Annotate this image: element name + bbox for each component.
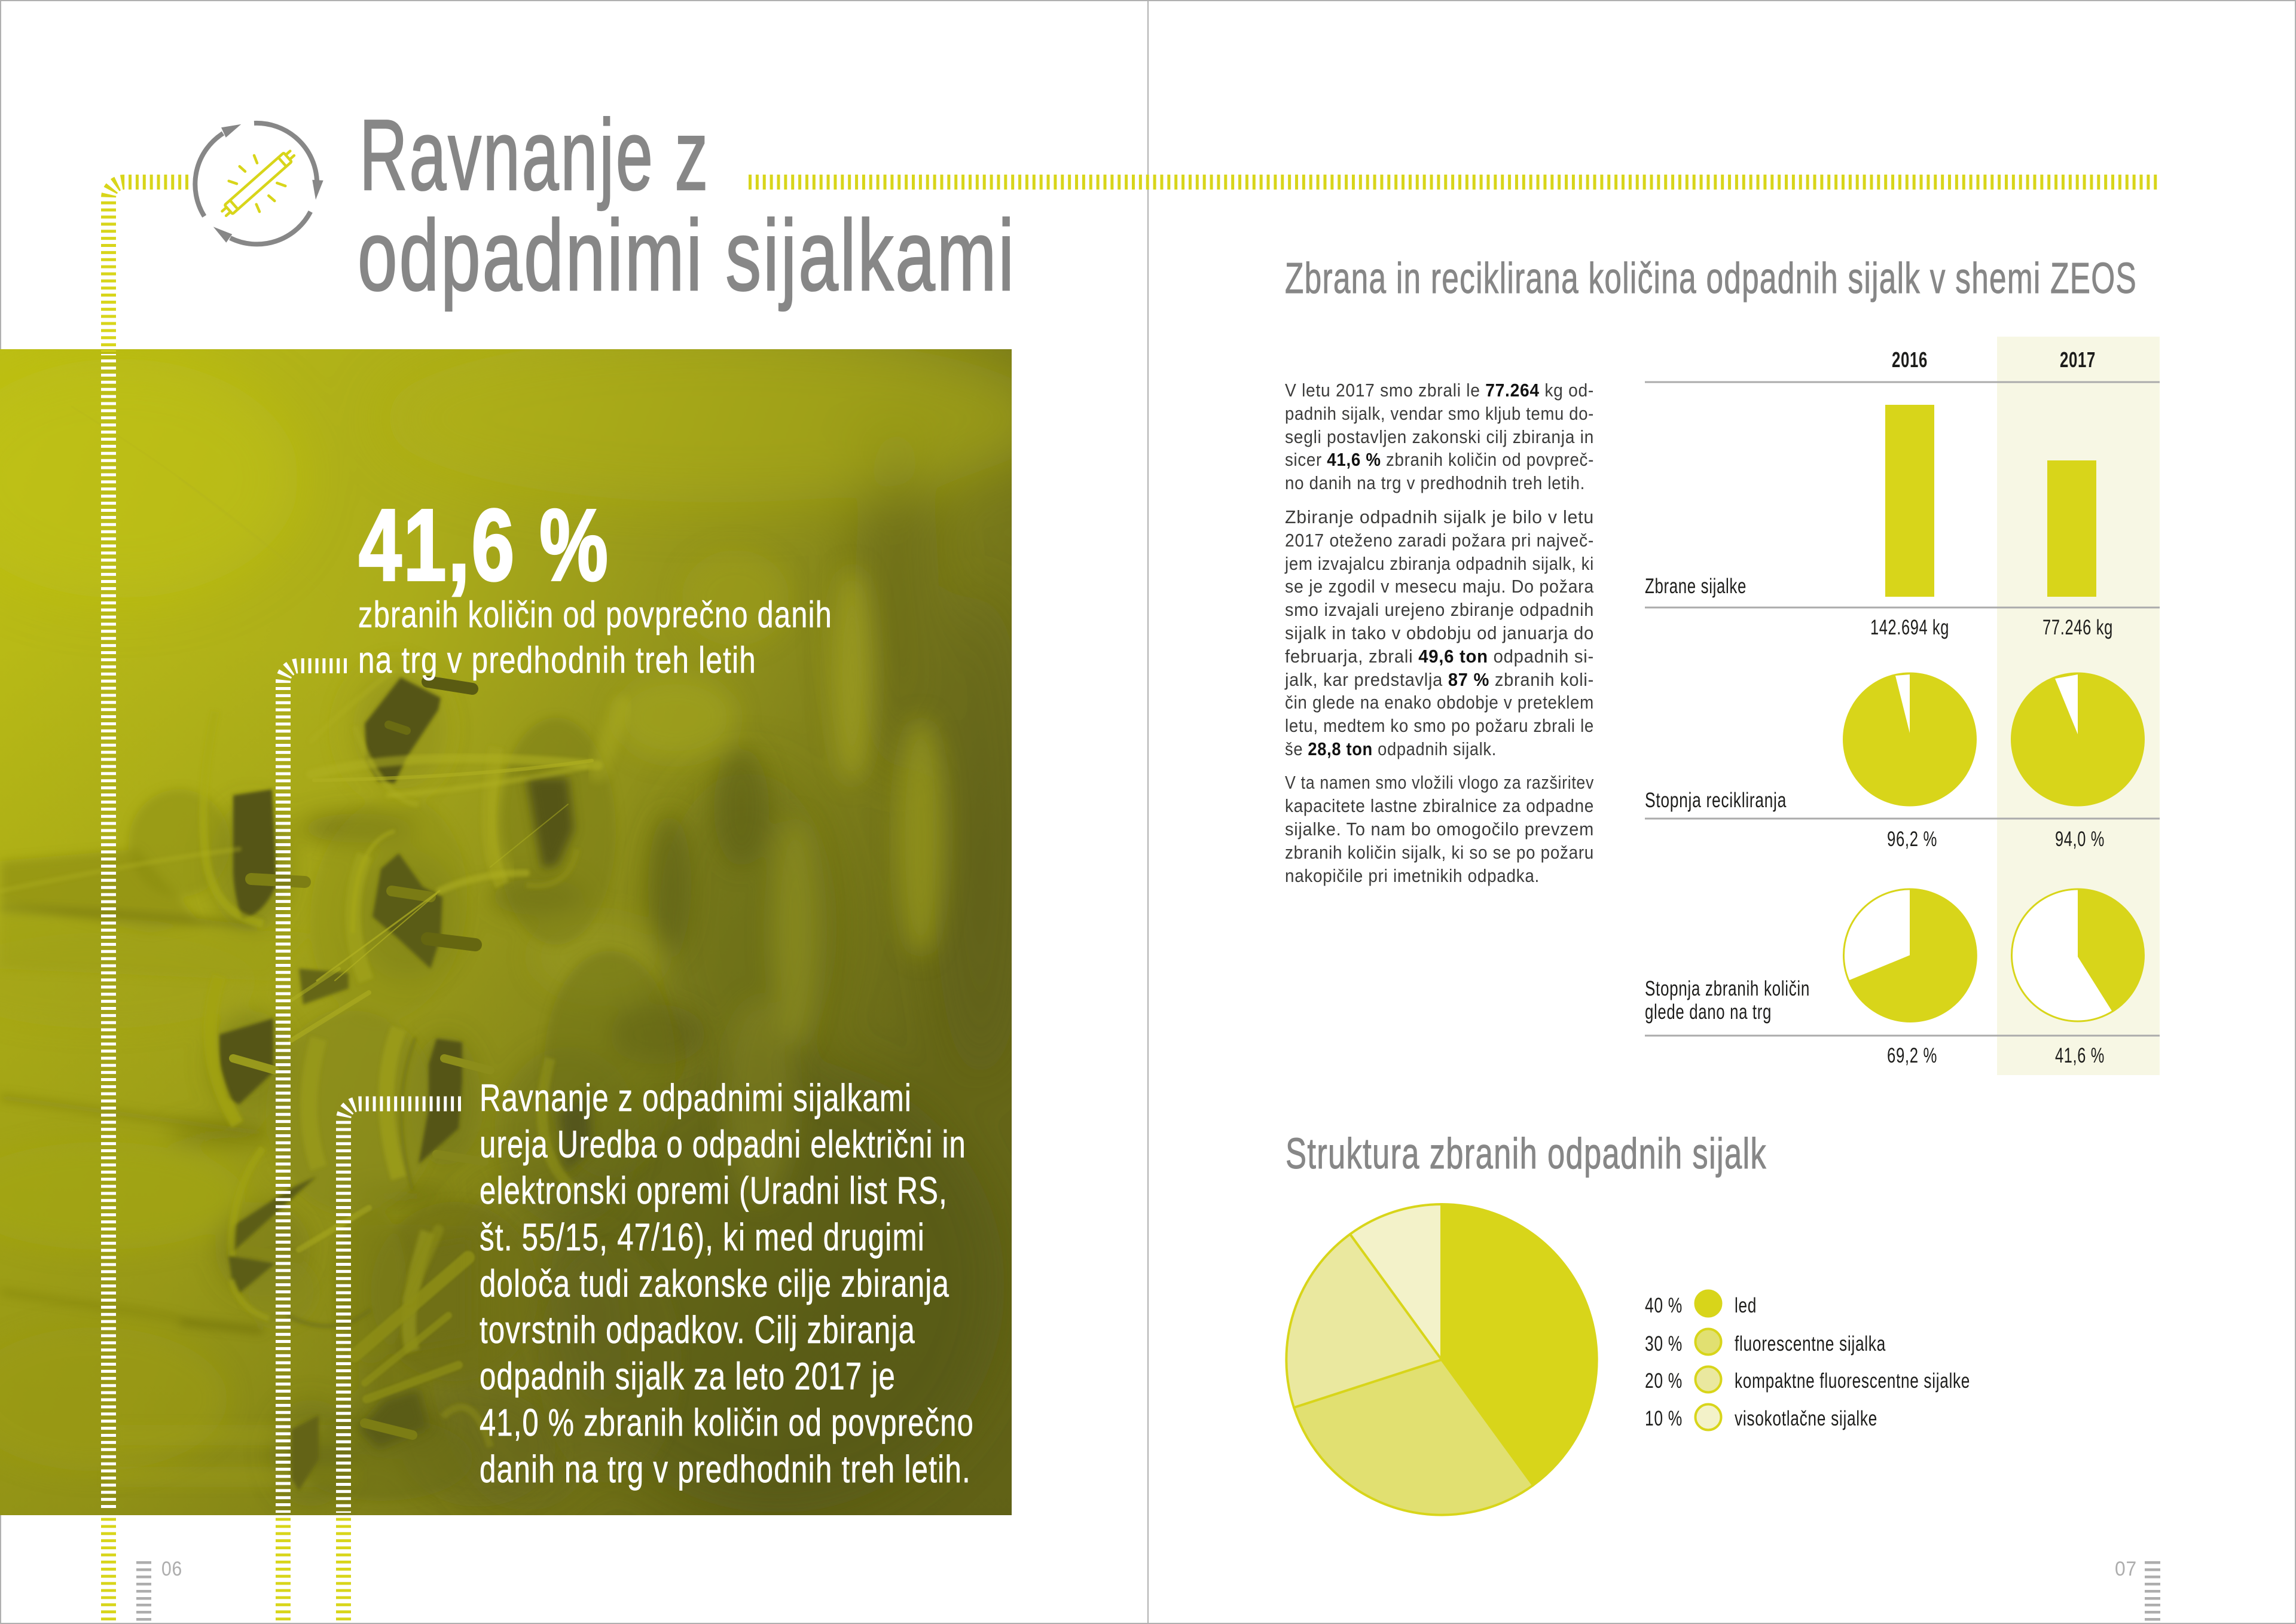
text block: explanation: Zbiranje odpadnih sijalk je bilo v letu (1285, 506, 1594, 527)
column headers: 2017 (2060, 347, 2096, 372)
collection values: 69,2 % (1887, 1044, 1937, 1067)
text block: regulation: določa tudi zakonske cilje zbiranja (480, 1262, 949, 1305)
text block: regulation: odpadnih sijalk za leto 2017 je (480, 1355, 896, 1398)
key figure caption (358, 594, 832, 681)
highlight column 2017 (1997, 337, 2160, 1075)
legend: visokotlačne sijalke (1735, 1407, 1877, 1430)
text block: regulation: št. 55/15, 47/16), ki med drugimi (480, 1216, 925, 1259)
pie chart: recycling rate 2016 (1843, 672, 1977, 806)
text block: explanation: sijalke. To nam bo omogočilo prevzem (1285, 819, 1594, 840)
text block: explanation: segli postavljen zakonski cilj zbiranja in (1285, 426, 1594, 447)
row label (1645, 977, 1810, 1024)
table rules (1645, 381, 2160, 1037)
text block: explanation: padnih sijalk, vendar smo kljub temu do- (1285, 403, 1594, 424)
pie chart: structure of collected lamps (1286, 1204, 1597, 1515)
key figure callout (358, 489, 832, 681)
text block: explanation: čin glede na enako obdobje v preteklem (1285, 692, 1594, 713)
recycling values: 96,2 % (1887, 828, 1937, 851)
row label: glede dano na trg (1645, 1000, 1772, 1024)
legend (1645, 1290, 1970, 1430)
dashed line: title connector on photo (101, 354, 116, 1508)
bar chart: collected lamps (1885, 405, 2096, 597)
dashed line: body text connector foot (336, 1517, 351, 1620)
column headers (1892, 347, 2096, 372)
text block: regulation (480, 1076, 974, 1491)
text block: regulation: elektronski opremi (Uradni list RS, (480, 1169, 948, 1212)
dashed guide lines (109, 182, 2158, 1620)
dashed line: title connector (109, 182, 188, 352)
row label: Stopnja recikliranja (1645, 789, 1787, 812)
key figure number: 41,6 % (359, 489, 610, 602)
text block: explanation: letu, medtem ko smo po požaru zbrali le (1285, 715, 1594, 736)
text block: explanation: jem izvajalcu zbiranja odpadnih sijalk, ki (1284, 553, 1594, 574)
bar values: 142.694 kg (1870, 616, 1949, 639)
legend: 10 % (1645, 1407, 1683, 1430)
glass fibre strands (0, 407, 622, 1399)
column headers: 2016 (1892, 347, 1928, 372)
collection values: 41,6 % (2055, 1044, 2105, 1067)
dashed line: body text connector (343, 1104, 461, 1513)
legend: kompaktne fluorescentne sijalke (1735, 1369, 1970, 1393)
recycling values (1887, 828, 2105, 851)
page number: right: 07 (2115, 1558, 2137, 1580)
pie chart: collection rate 2017 (2011, 889, 2144, 1021)
text block: explanation: nakopičile pri imetnikih odpadka. (1285, 865, 1540, 886)
legend: 20 % (1645, 1369, 1683, 1393)
row label: Zbrane sijalke (1645, 575, 1747, 598)
dashed line: key figure connector foot (276, 1517, 291, 1620)
dashed line: title connector foot (101, 1517, 116, 1620)
text block: explanation (1284, 380, 1594, 886)
collection values (1887, 1044, 2105, 1067)
title: odpadnimi sijalkami (358, 199, 1016, 312)
bar values (1870, 616, 2113, 639)
text block: explanation: se je zgodil v mesecu maju. Do požara (1285, 576, 1594, 597)
key figure caption: zbranih količin od povprečno danih (358, 594, 832, 636)
legend: led (1735, 1294, 1757, 1317)
bar values: 77.246 kg (2042, 616, 2113, 639)
dashed line: headline rule (749, 175, 2158, 190)
page number: right (2115, 1558, 2160, 1620)
rings around tube ends (203, 712, 577, 1447)
title (358, 99, 1016, 312)
key figure caption: na trg v predhodnih treh letih (358, 640, 756, 681)
text block: explanation: februarja, zbrali 49,6 ton odpadnih si- (1285, 646, 1594, 667)
title: Ravnanje z (359, 99, 710, 211)
heading: structure: Struktura zbranih odpadnih sijalk (1286, 1130, 1767, 1178)
dark tube openings (219, 677, 592, 1491)
text block: regulation: 41,0 % zbranih količin od povprečno (480, 1401, 974, 1444)
photo panel: fluorescent tubes duotone (0, 335, 1052, 1515)
text block: explanation: jalk, kar predstavlja 87 % zbranih koli- (1284, 669, 1594, 690)
text block: explanation: sicer 41,6 % zbranih količin od povpreč- (1285, 449, 1594, 470)
page number: left (136, 1558, 182, 1620)
contact pins (233, 682, 598, 1435)
text block: explanation: V ta namen smo vložili vlogo za razširitev (1285, 772, 1594, 793)
legend: 40 % (1645, 1294, 1683, 1317)
page number: left: 06 (161, 1558, 182, 1580)
blurred tube shells (0, 717, 655, 1498)
text block: explanation: V letu 2017 smo zbrali le 77.264 kg od- (1285, 380, 1594, 401)
text block: regulation: ureja Uredba o odpadni električni in (480, 1123, 966, 1166)
text block: explanation: zbranih količin sijalk, ki so se po požaru (1285, 842, 1594, 863)
pie chart: collection rate 2016 (1844, 889, 1977, 1022)
panel: comparison table (1645, 337, 2160, 1075)
text block: regulation: danih na trg v predhodnih treh letih. (480, 1448, 971, 1491)
text block: regulation: tovrstnih odpadkov. Cilj zbiranja (480, 1308, 915, 1351)
text block: explanation: sijalk in tako v obdobju od januarja do (1285, 622, 1594, 643)
row label: Stopnja zbranih količin (1645, 977, 1810, 1000)
icon: grey cycle arrows (195, 123, 323, 244)
legend: fluorescentne sijalka (1735, 1332, 1886, 1356)
icon: recycling arrows around fluorescent tube (195, 123, 323, 244)
pie chart: recycling rate 2017 (2011, 672, 2145, 806)
text block: explanation: no danih na trg v predhodnih treh letih. (1285, 472, 1585, 493)
text block: explanation: še 28,8 ton odpadnih sijalk. (1285, 738, 1497, 759)
icon: yellow tube (220, 149, 296, 218)
text block: explanation: smo izvajali urejeno zbiranje odpadnih (1285, 599, 1594, 620)
text block: explanation: 2017 oteženo zaradi požara pri največ- (1285, 530, 1594, 551)
text block: explanation: kapacitete lastne zbiralnice za odpadne (1285, 795, 1594, 816)
dashed line: key figure connector (283, 666, 347, 1513)
legend: 30 % (1645, 1332, 1683, 1356)
recycling values: 94,0 % (2055, 828, 2105, 851)
text block: regulation: Ravnanje z odpadnimi sijalkami (480, 1076, 912, 1119)
